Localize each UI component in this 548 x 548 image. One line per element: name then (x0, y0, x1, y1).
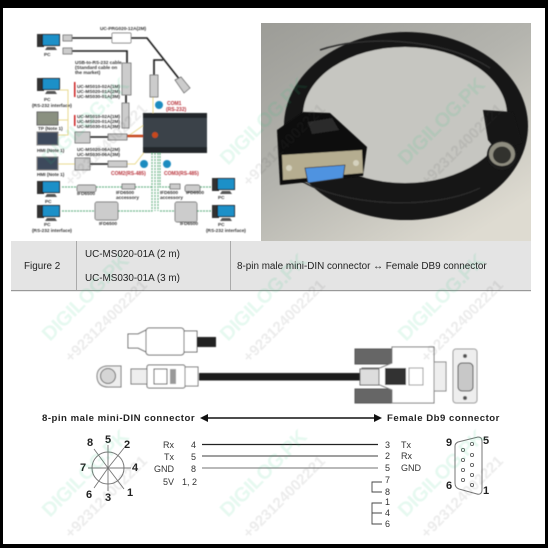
pinout: wiring table: 3 (385, 440, 390, 450)
pinout: wiring table: 8 (191, 464, 196, 474)
pinout: wiring table: 5 (191, 452, 196, 462)
pinout: mini-DIN circle: 1 (127, 487, 133, 499)
pinout: DB9 face: 5 (483, 435, 489, 447)
table row: Figure 2 (11, 241, 531, 291)
COM port labels: COM2(RS-485) (111, 171, 146, 177)
pinout: wiring table: 2 (385, 451, 390, 461)
pinout: wiring table: Tx (164, 452, 174, 462)
arrow: orange signal to PLC (127, 135, 152, 137)
pinout: mini-DIN circle (80, 434, 139, 504)
cable drawing: mini-DIN face (97, 366, 121, 387)
table row: Figure 2: UC-MS020-01A (2 m) (85, 249, 180, 260)
pinout: wiring table: 8 (385, 487, 390, 497)
pinout: wiring table (154, 440, 422, 529)
diagram labels: USB-to-RS-232 cable (75, 60, 122, 65)
red markers (74, 82, 76, 126)
diagram labels: (RS-232 interface) (206, 228, 246, 233)
table row: Figure 2: UC-MS030-01A (3 m) (85, 273, 180, 284)
watermarks: DIGILOG.PK (216, 425, 312, 522)
watermarks: +923124002221 (240, 277, 329, 366)
pinout: wiring table: 7 (385, 475, 390, 485)
watermarks: +923124002221 (62, 101, 151, 190)
watermarks: +923124002221 (62, 453, 151, 542)
watermarks: DIGILOG.PK (216, 73, 312, 170)
pinout: DB9 face: 6 (446, 480, 452, 492)
watermarks: DIGILOG.PK (394, 73, 490, 170)
diagram labels: accessory (160, 195, 183, 200)
pinout: DB9 face (446, 435, 489, 497)
icons: PCs (37, 34, 235, 221)
pinout: wiring table: Rx (163, 440, 174, 450)
diagram labels: UC-MS020-06A(2M) (77, 147, 120, 152)
panel: cable photograph (261, 23, 531, 241)
COM port labels: (RS-232) (166, 107, 187, 113)
watermarks: DIGILOG.PK (38, 249, 134, 346)
diagram labels: PC (45, 199, 52, 204)
diagram labels: UC-MS010-02A(1M) (77, 114, 120, 119)
pinout: wiring table: 5 (385, 463, 390, 473)
pinout: wiring table: 4 (385, 508, 390, 518)
diagram labels: IFD6500 (116, 190, 134, 195)
diagram labels: IFD6500 (77, 191, 95, 196)
watermarks: DIGILOG.PK (394, 425, 490, 522)
PLC unit (143, 113, 207, 153)
cable drawing: DB9 face (453, 349, 477, 403)
pinout: mini-DIN circle: 2 (124, 439, 130, 451)
pinout: wiring table: 5V (163, 477, 174, 487)
cables: green and yellow links (62, 153, 212, 211)
port badges (140, 101, 171, 168)
watermarks: +923124002221 (240, 101, 329, 190)
connectors (63, 33, 200, 222)
DB9 connector (277, 112, 367, 185)
mini-DIN plug (483, 110, 522, 170)
pinout: DB9 face: 9 (446, 437, 452, 449)
table row: Figure 2: Figure 2 (24, 261, 60, 272)
diagram labels: HMI (Note 1) (37, 172, 65, 177)
cable drawing: DB9 hood (355, 347, 446, 403)
pinout: wiring table: 1, 2 (182, 477, 197, 487)
pinout: mini-DIN circle: 7 (80, 462, 86, 474)
heading: connector names with double arrow: 8-pin male mini-DIN connector (42, 413, 195, 424)
pinout: wiring table: 4 (191, 440, 196, 450)
screens (37, 112, 58, 170)
pinout: wiring table: 6 (385, 519, 390, 529)
diagram labels: PC (44, 52, 51, 57)
cable drawing: mini-DIN plug and cable (131, 365, 362, 388)
diagram labels: UC-MS010-02A(1M) (77, 84, 120, 89)
COM port labels (111, 101, 199, 177)
diagram labels: (Standard cable on (75, 65, 117, 70)
pinout: wiring table: GND (154, 464, 174, 474)
panel: PLC wiring diagram (32, 26, 246, 233)
diagram labels: PC (218, 222, 225, 227)
watermarks: +923124002221 (418, 277, 507, 366)
diagram labels: UC-PRG020-12A(2M) (100, 26, 147, 31)
diagram labels: the market) (75, 70, 101, 75)
cable drawing: side view of mini-DIN plug (128, 328, 216, 355)
diagram labels: UC-MS030-01A(3M) (77, 94, 120, 99)
coiled cable (284, 32, 528, 220)
diagram labels: UC-MS030-01A(3M) (77, 124, 120, 129)
pinout: mini-DIN circle: 6 (86, 489, 92, 501)
diagram labels: (RS-232 interface) (32, 103, 72, 108)
pinout: wiring table: GND (401, 463, 422, 473)
pinout: wiring table: Tx (401, 440, 411, 450)
pinout: mini-DIN circle: 5 (105, 434, 111, 446)
pinout: DB9 face: 1 (483, 485, 489, 497)
watermarks: +923124002221 (418, 453, 507, 542)
diagram labels: PC (44, 97, 51, 102)
heading: connector names with double arrow (42, 413, 500, 424)
heading: connector names with double arrow: Female Db9 connector (387, 413, 500, 424)
watermarks: DIGILOG.PK (38, 73, 134, 170)
watermarks: +923124002221 (418, 101, 507, 190)
diagram labels: HMI (Note 1) (37, 148, 65, 153)
pinout: wiring table: 1 (385, 497, 390, 507)
pinout: mini-DIN circle: 8 (87, 437, 93, 449)
pinout: mini-DIN circle: 4 (132, 462, 139, 474)
diagram labels: PC (44, 222, 51, 227)
diagram labels (32, 26, 246, 233)
diagram labels: IFD6500 (186, 190, 204, 195)
watermarks: DIGILOG.PK (216, 249, 312, 346)
diagram labels: (RS-232 interface) (32, 228, 72, 233)
diagram labels: UC-MS030-06A(3M) (77, 152, 120, 157)
watermarks (38, 73, 507, 542)
diagram labels: IFD6500 (99, 221, 117, 226)
watermarks: DIGILOG.PK (394, 249, 490, 346)
diagram labels: UC-MS020-01A(2M) (77, 89, 120, 94)
diagram labels: TP (Note 1) (38, 126, 63, 131)
diagram labels: IFD6500 (180, 221, 198, 226)
cables: black serial leads (70, 38, 180, 164)
pinout: wiring table: Rx (401, 451, 412, 461)
diagram labels: UC-MS020-01A(2M) (77, 119, 120, 124)
watermarks: +923124002221 (240, 453, 329, 542)
COM port labels: COM1 (167, 101, 182, 107)
watermarks: DIGILOG.PK (38, 425, 134, 522)
table row: Figure 2: 8-pin male mini-DIN connector ↔ Female DB9 connector (237, 261, 487, 272)
diagram labels: IFD6500 (160, 190, 178, 195)
diagram labels: PC (218, 195, 225, 200)
watermarks: +923124002221 (62, 277, 151, 366)
pinout: mini-DIN circle: 3 (105, 492, 111, 504)
COM port labels: COM3(RS-485) (164, 171, 199, 177)
diagram labels: accessory (116, 195, 139, 200)
